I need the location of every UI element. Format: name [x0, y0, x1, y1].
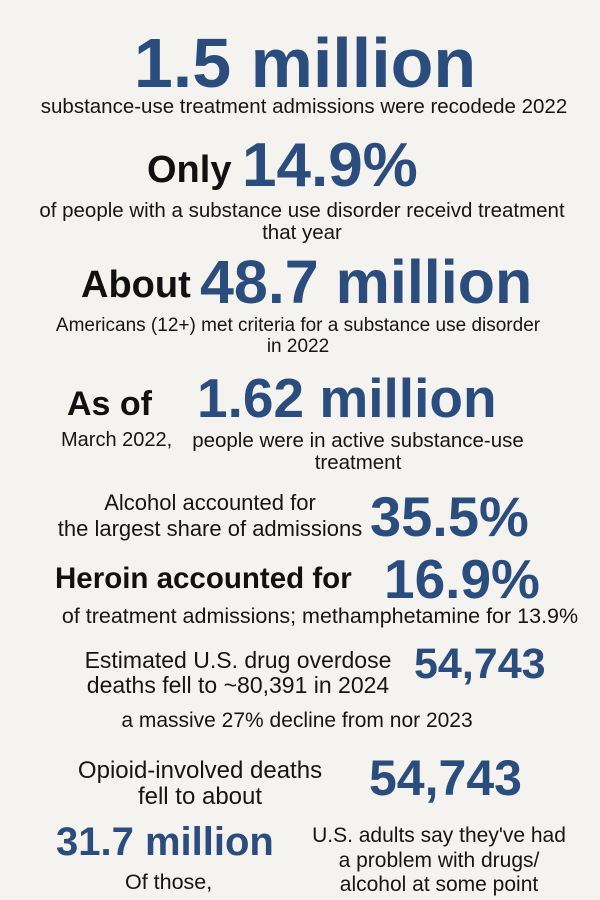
- caption: Of those: Of those,: [125, 870, 212, 894]
- caption: decline: a massive 27% decline from nor 2023: [121, 709, 473, 732]
- caption: received treatment: [39, 199, 565, 244]
- stat: 54,743: 54,743: [414, 640, 546, 688]
- label: About: About: [81, 264, 191, 306]
- caption: alcohol: the largest share of admissions: [58, 516, 362, 541]
- caption: admissions: substance-use treatment admissions were recodede 2022: [41, 95, 567, 118]
- caption: received treatment: that year: [262, 221, 342, 244]
- stat: opioid 54,743: 54,743: [369, 750, 522, 806]
- caption: Americans: Americans (12+) met criteria for a substance use disorder: [56, 315, 540, 336]
- stat: 48.7 million: 48.7 million: [200, 248, 532, 316]
- label: Only: Only: [147, 149, 231, 191]
- caption: opioid deaths: [78, 757, 322, 810]
- caption: Americans: [56, 315, 540, 357]
- caption: adults problem: [312, 824, 566, 896]
- caption: March 2022: March 2022,: [61, 429, 172, 451]
- caption: overdose deaths: Estimated U.S. drug overdose: [85, 647, 391, 673]
- stat: 16.9%: 16.9%: [384, 548, 540, 610]
- caption: active treatment: people were in active substance-use: [192, 429, 524, 452]
- stat: 14.9%: 14.9%: [242, 131, 418, 200]
- caption: overdose deaths: [85, 647, 391, 698]
- caption: active treatment: treatment: [315, 451, 401, 474]
- stat: 1.5 million: 1.5 million: [134, 24, 476, 102]
- stat: 31.7 million: 31.7 million: [56, 820, 274, 864]
- stat: 1.62 million: 1.62 million: [197, 367, 497, 429]
- label: As of: As of: [67, 385, 152, 423]
- stat: 35.5%: 35.5%: [370, 485, 529, 548]
- caption: adults problem: U.S. adults say they've had: [312, 824, 566, 847]
- caption: alcohol: Alcohol accounted for: [104, 490, 316, 515]
- caption: active treatment: [192, 429, 524, 474]
- caption: adults problem: alcohol at some point: [340, 873, 538, 896]
- caption: opioid deaths: Opioid-involved deaths: [78, 757, 322, 784]
- caption: methamphetamine: of treatment admissions; methamphetamine for 13.9%: [62, 604, 578, 628]
- caption: Americans: in 2022: [267, 336, 329, 357]
- caption: overdose deaths: deaths fell to ~80,391 in 2024: [87, 672, 389, 698]
- label: heroin: Heroin accounted for: [55, 562, 352, 595]
- caption: alcohol: [58, 490, 362, 541]
- caption: received treatment: of people with a substance use disorder receivd treatment: [39, 199, 565, 222]
- caption: adults problem: a problem with drugs/: [339, 848, 539, 872]
- caption: opioid deaths: fell to about: [138, 783, 262, 810]
